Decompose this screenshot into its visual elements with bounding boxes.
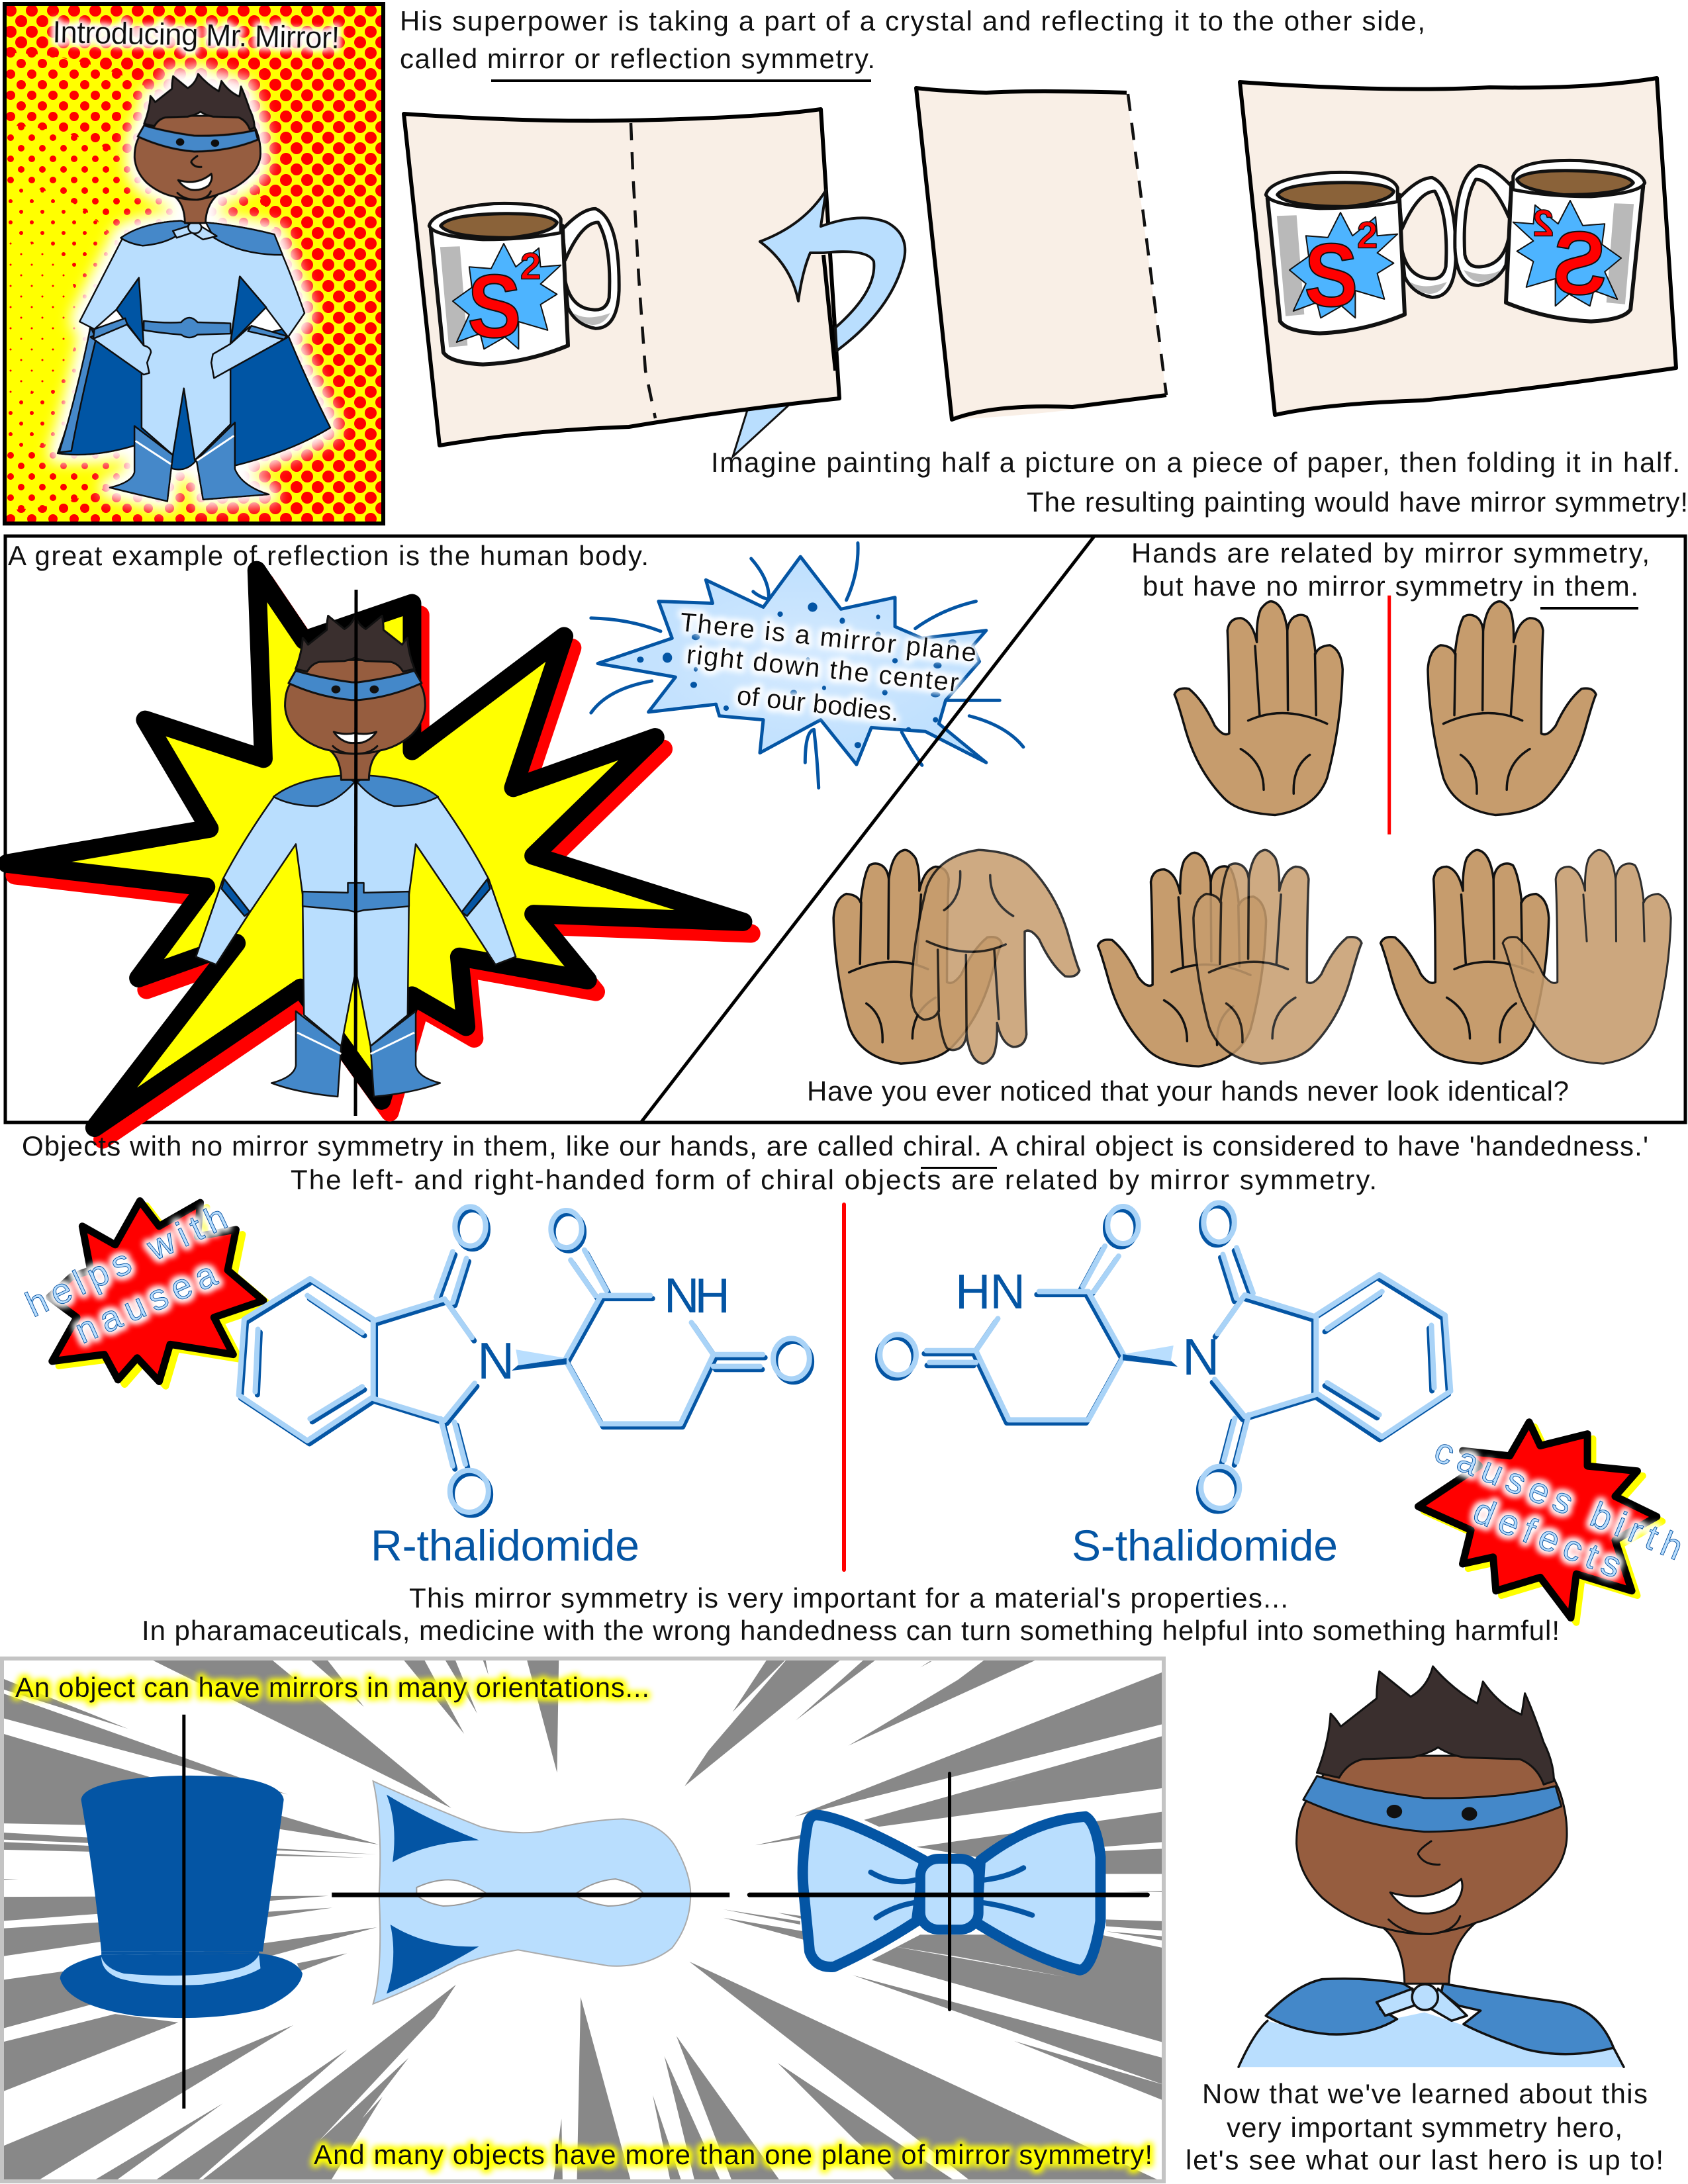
vertical mirror	[182, 1715, 185, 2109]
caption: imagine painting: Imagine painting half a picture on a piece of paper, then folding it in half.	[711, 447, 1680, 478]
head halves	[285, 613, 426, 780]
action lines	[591, 543, 1023, 788]
text: chirality intro	[22, 1130, 1648, 1195]
halftone background	[7, 6, 381, 522]
fold line	[631, 123, 655, 418]
text: mirror symmetry importance: In pharamaceuticals, medicine with the wrong handedness can turn something helpful into something harmful!	[142, 1615, 1560, 1646]
panel: objects with mirror planes	[0, 1655, 1164, 2183]
mask	[332, 1781, 729, 2004]
hands pair: palm on upside down	[833, 850, 1080, 1064]
heading: superpower explanation	[400, 5, 1425, 82]
explosion burst behind hero	[7, 570, 751, 1140]
burst text: causes birth	[1429, 1430, 1688, 1568]
text: chirality intro: Objects with no mirror symmetry in them, like our hands, are called chiral. A chiral object is considered to have 'handedness.'	[22, 1130, 1648, 1161]
top hat	[60, 1715, 303, 2109]
mirror planes	[749, 1893, 1147, 1897]
panel: paper with one painted mug	[404, 109, 839, 445]
burst text	[679, 608, 978, 727]
atom labels: N	[477, 1332, 514, 1390]
panel: paper with mirrored mugs	[1240, 78, 1676, 415]
hands pair: overlapping mirror	[1098, 850, 1362, 1066]
text: hands mirror symmetry: Hands are related by mirror symmetry,	[1131, 537, 1650, 569]
shoulders	[1239, 2013, 1624, 2067]
molecule: S-thalidomide: HN	[955, 1264, 1025, 1319]
top left hand	[1174, 602, 1342, 815]
head	[1297, 1666, 1567, 1983]
burst outline	[598, 557, 1000, 764]
text: closing caption: very important symmetry hero,	[1227, 2112, 1622, 2143]
text: chirality intro: The left- and right-handed form of chiral objects are related by mirror symmetry.	[291, 1164, 1377, 1195]
text: closing caption: let's see what our last hero is up to!	[1186, 2144, 1664, 2175]
portrait: Mr. Mirror bust	[1239, 1666, 1624, 2067]
top right hand mirrored	[1428, 602, 1596, 815]
title: Introducing Mr. Mirror: Introducing Mr. Mirror!	[52, 15, 340, 55]
panel: folded half sheet	[916, 88, 1166, 420]
hands pair: translated copy	[1381, 850, 1671, 1064]
heading: superpower explanation: His superpower is taking a part of a crystal and reflecting it to the other side,	[400, 5, 1425, 36]
mug right mirrored	[1455, 160, 1645, 322]
text: many orientations: An object can have mirrors in many orientations...	[15, 1672, 649, 1703]
hero: Mr. Mirror standing symmetric	[196, 590, 516, 1116]
burst text: right down the center	[685, 640, 960, 698]
molecule: S-thalidomide	[878, 1203, 1450, 1570]
bow tie	[749, 1774, 1147, 2010]
arrow tail below first paper	[733, 404, 790, 457]
text: human body reflection: A great example of reflection is the human body.	[8, 540, 649, 571]
burst: causes birth defects	[1418, 1422, 1688, 1623]
arrow: folding the paper	[760, 190, 905, 371]
name: S-thalidomide	[1072, 1521, 1338, 1570]
atom labels: N	[1182, 1328, 1219, 1386]
mirror plane line	[355, 590, 356, 1116]
text: more than one plane: And many objects have more than one plane of mirror symmetry!	[314, 2139, 1152, 2170]
panel: introducing Mr. Mirror cover	[0, 4, 383, 582]
text: closing caption: Now that we've learned about this	[1202, 2078, 1648, 2109]
diagonal panel divider	[641, 535, 1095, 1122]
text: hands never look identical: Have you ever noticed that your hands never look identical?	[807, 1075, 1569, 1107]
hero: Mr. Mirror with hands on hips	[58, 73, 330, 501]
paper sheet	[1240, 78, 1676, 415]
hands illustrations	[833, 596, 1671, 1066]
nose	[1418, 1841, 1440, 1864]
fold line	[1128, 94, 1166, 395]
text: mirror symmetry importance: This mirror symmetry is very important for a material's properties...	[409, 1582, 1288, 1614]
caption: imagine painting: The resulting painting would have mirror symmetry!	[1027, 486, 1688, 518]
horizontal mirror	[332, 1893, 729, 1897]
mug left	[1266, 172, 1456, 334]
text: hands mirror symmetry: but have no mirror symmetry in them.	[1143, 570, 1638, 602]
cape clasp	[1377, 1989, 1414, 2016]
burst dots	[637, 602, 957, 748]
burst text: defects	[1468, 1490, 1627, 1586]
cape collar	[1266, 1979, 1417, 2034]
burst: helps with nausea	[20, 1197, 270, 1387]
name: R-thalidomide	[371, 1521, 639, 1570]
text: hands mirror symmetry	[1131, 537, 1650, 610]
text: closing caption	[1186, 2078, 1664, 2175]
text: mirror symmetry importance	[142, 1582, 1560, 1646]
molecule: R-thalidomide: NH	[664, 1268, 730, 1323]
left half of body	[196, 776, 356, 1097]
mug	[429, 203, 619, 365]
burst text: helps with	[20, 1197, 233, 1325]
right half of body	[355, 776, 516, 1097]
heading: superpower explanation: called mirror or reflection symmetry.	[400, 43, 875, 74]
red mirror line	[1387, 596, 1391, 835]
burst text: There is a mirror plane	[679, 608, 978, 668]
red mirror line	[842, 1205, 846, 1570]
burst text: nausea	[69, 1253, 223, 1351]
burst text: of our bodies.	[735, 681, 900, 727]
radiating speed lines	[0, 1655, 1164, 2183]
paper sheet	[404, 109, 839, 445]
panel: human body and hands frame	[5, 536, 1685, 1122]
callout: mirror plane burst	[591, 543, 1023, 788]
caption: imagine painting	[711, 447, 1688, 518]
molecule: R-thalidomide	[239, 1206, 812, 1570]
